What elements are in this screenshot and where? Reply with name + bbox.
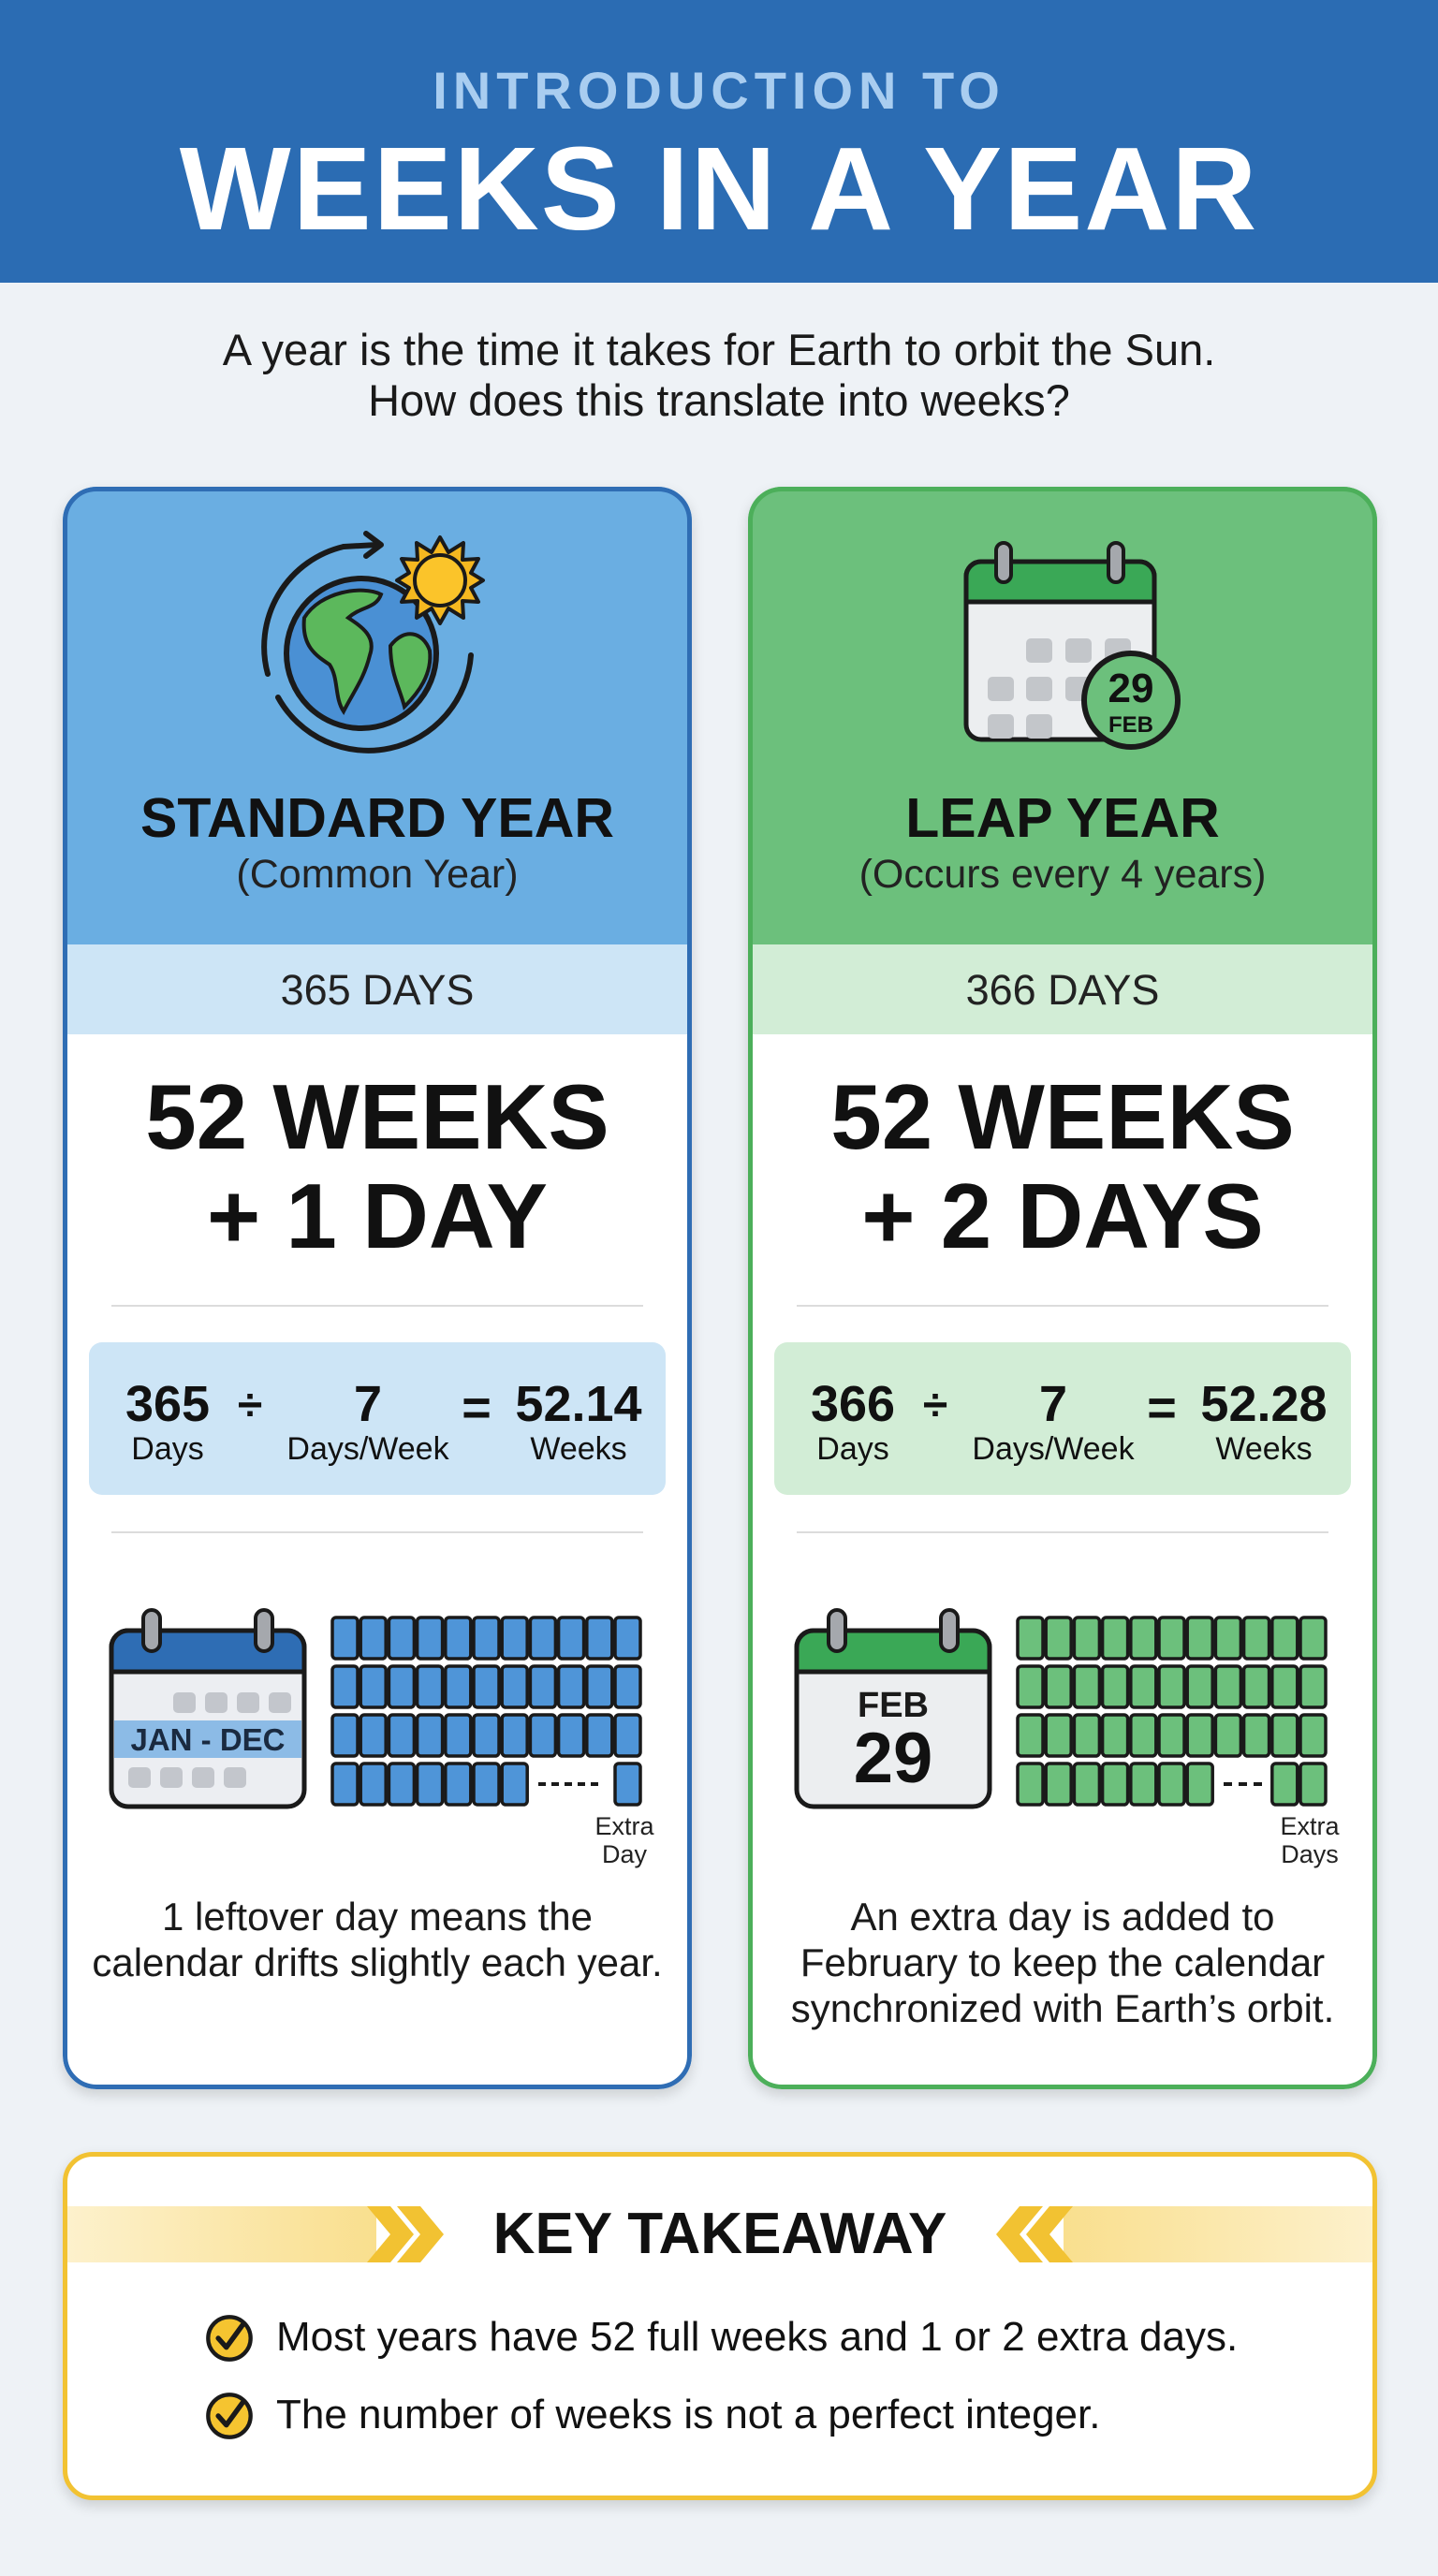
equation box: Weeks — [1215, 1431, 1313, 1467]
equation box: = — [1147, 1380, 1177, 1436]
equation box: Weeks — [530, 1431, 627, 1467]
days count: 365 DAYS — [281, 966, 474, 1014]
label: extra day: Day — [602, 1840, 647, 1868]
title line 2: WEEKS IN A YEAR — [180, 123, 1258, 255]
icon: leap calendar with 29 feb badge — [964, 541, 1181, 750]
icon: calendar jan-dec: JAN - DEC — [130, 1722, 286, 1757]
subheading: (Common Year) — [236, 852, 519, 897]
weeks result — [145, 1065, 609, 1267]
panel: key takeaway — [63, 2152, 1377, 2500]
caption: synchronized with Earth’s orbit. — [791, 1986, 1334, 2030]
icon: calendar feb 29 — [794, 1608, 992, 1808]
equation box: 7 — [354, 1376, 382, 1432]
bullet 2: The number of weeks is not a perfect integer. — [276, 2392, 1100, 2437]
weeks result — [830, 1065, 1295, 1267]
panel: standard year — [63, 487, 692, 2089]
caption — [92, 1895, 663, 1984]
panel: leap year — [748, 487, 1377, 2089]
equation box: Days/Week — [972, 1431, 1135, 1467]
caption: An extra day is added to — [851, 1895, 1274, 1939]
label: extra days: Days — [1281, 1840, 1339, 1868]
equation box: Days — [131, 1431, 204, 1467]
title line 1: INTRODUCTION TO — [433, 61, 1005, 120]
label: extra day: Extra — [594, 1812, 654, 1840]
equation box: ÷ — [238, 1381, 262, 1430]
weeks result: + 2 DAYS — [861, 1164, 1264, 1267]
icon: calendar jan-dec — [109, 1608, 307, 1808]
icon: earth orbiting sun — [261, 531, 485, 754]
equation box: Days/Week — [286, 1431, 449, 1467]
caption: calendar drifts slightly each year. — [92, 1940, 663, 1984]
equation box: ÷ — [923, 1381, 947, 1430]
heading: KEY TAKEAWAY — [493, 2202, 946, 2266]
subtitle: A year is the time it takes for Earth to orbit the Sun. — [223, 325, 1215, 374]
title band — [67, 2206, 1372, 2262]
chart: 52 week grid — [1016, 1616, 1328, 1807]
icon: calendar feb 29: 29 — [854, 1719, 932, 1798]
chart: 52 week grid — [330, 1616, 642, 1807]
equation box: 52.28 — [1200, 1376, 1328, 1432]
equation box: Days — [816, 1431, 889, 1467]
equation box: 365 — [125, 1376, 210, 1432]
subheading: (Occurs every 4 years) — [859, 852, 1266, 897]
equation box — [774, 1342, 1351, 1495]
icon: leap calendar with 29 feb badge: 29 — [1108, 666, 1153, 711]
weeks result: + 1 DAY — [207, 1164, 548, 1267]
weeks result: 52 WEEKS — [830, 1065, 1295, 1168]
heading: LEAP YEAR — [905, 787, 1220, 849]
subtitle — [223, 325, 1215, 425]
days count: 366 DAYS — [966, 966, 1159, 1014]
caption: February to keep the calendar — [800, 1940, 1325, 1984]
bullet 1: Most years have 52 full weeks and 1 or 2 extra days. — [276, 2314, 1238, 2360]
icon: leap calendar with 29 feb badge: FEB — [1108, 712, 1153, 738]
caption: 1 leftover day means the — [162, 1895, 593, 1939]
label: extra days: Extra — [1280, 1812, 1340, 1840]
label: extra days — [1280, 1812, 1340, 1868]
weeks result: 52 WEEKS — [145, 1065, 609, 1168]
heading: STANDARD YEAR — [140, 787, 614, 849]
equation box: 366 — [811, 1376, 895, 1432]
subtitle: How does this translate into weeks? — [368, 375, 1070, 425]
icon: calendar feb 29: FEB — [858, 1686, 929, 1725]
bullet list — [206, 2314, 1238, 2439]
equation box: 7 — [1039, 1376, 1067, 1432]
equation box — [89, 1342, 666, 1495]
label: extra day — [594, 1812, 654, 1868]
caption — [791, 1895, 1334, 2030]
equation box: 52.14 — [515, 1376, 642, 1432]
header banner — [0, 0, 1438, 283]
equation box: = — [462, 1380, 492, 1436]
